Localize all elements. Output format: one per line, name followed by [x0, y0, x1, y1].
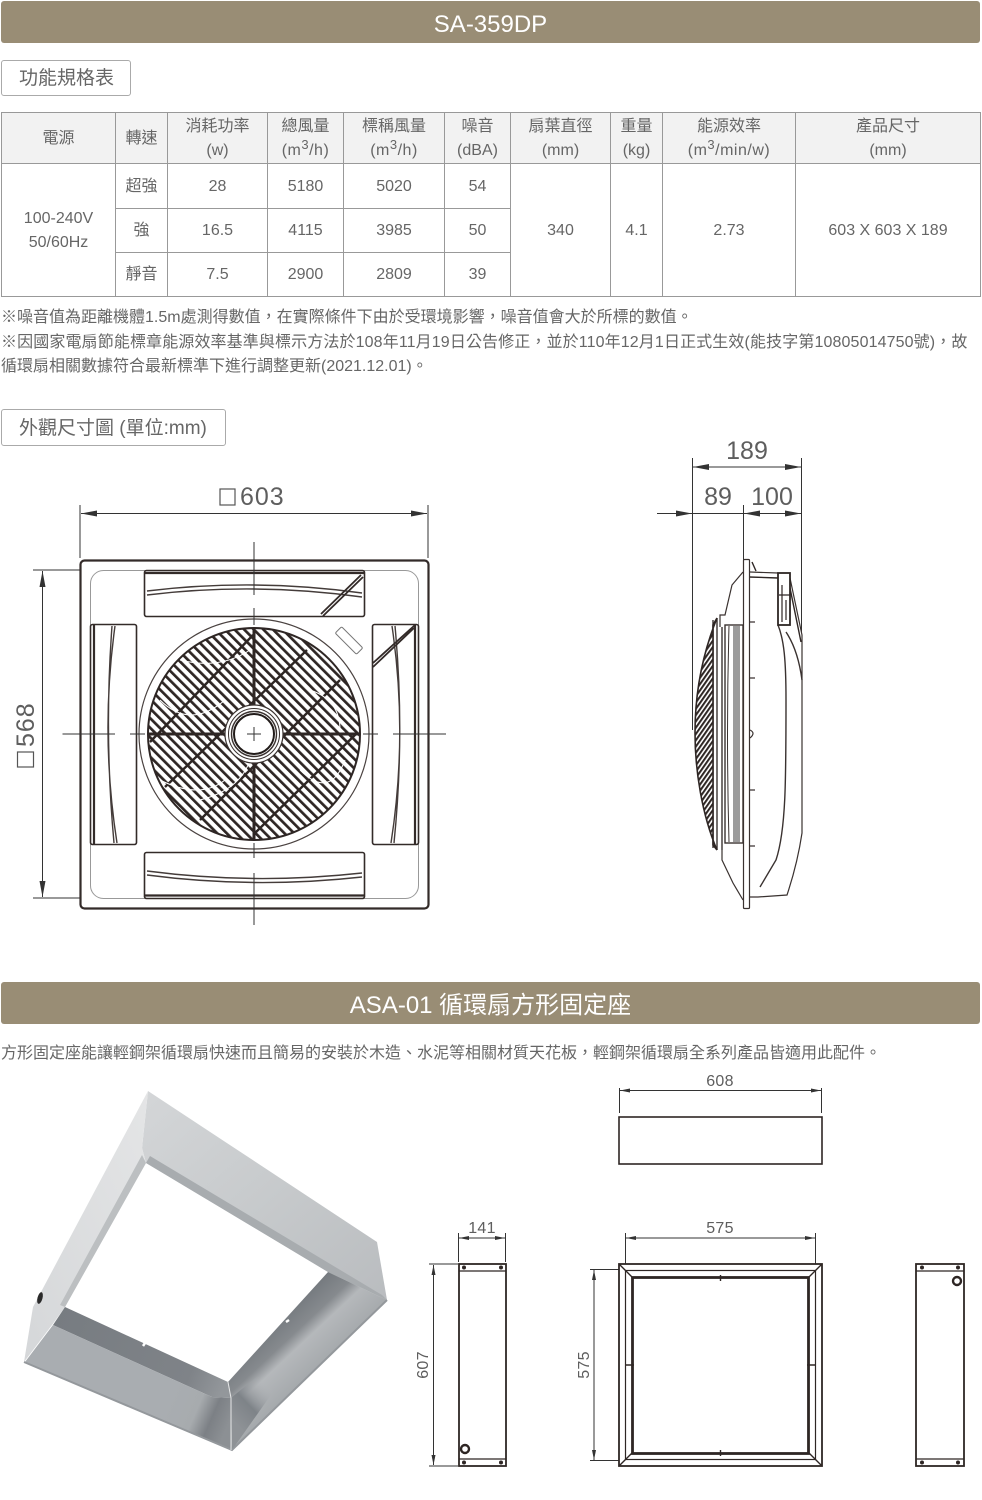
- heading: SA-359DP: [1, 1, 980, 43]
- spec table: 50: [469, 222, 486, 239]
- dimension: 141: 141: [468, 1220, 496, 1237]
- spec table: 標稱風量: [362, 118, 426, 135]
- dimension: 607: 607: [415, 1351, 432, 1379]
- spec table: 50/60Hz: [29, 234, 88, 250]
- cable hole: [36, 1292, 44, 1304]
- spec table: 總風量: [281, 118, 330, 135]
- spec table: 消耗功率: [185, 118, 250, 135]
- tab heading: dimension drawing: 外觀尺寸圖 (單位:mm): [19, 418, 207, 439]
- vent: left: [90, 624, 136, 844]
- spec table: (m3/h): [282, 137, 329, 159]
- side ticks: [750, 622, 755, 846]
- spec table: 5020: [376, 178, 412, 194]
- spec table: 16.5: [202, 222, 233, 239]
- spec table: 噪音: [461, 118, 494, 135]
- spec table: 39: [469, 266, 486, 283]
- drawing: frame right side: [916, 1264, 964, 1466]
- dimension: 608: [620, 1073, 822, 1113]
- spec table: 4115: [288, 222, 323, 239]
- small slot: [335, 627, 363, 654]
- spec table: (m3/min/w): [688, 137, 770, 159]
- back face: [142, 1091, 387, 1300]
- front view drawing of fan: [12, 483, 446, 925]
- top connecting band: [749, 562, 801, 642]
- spec table: 28: [209, 178, 226, 194]
- heading: SA-359DP: SA-359DP: [434, 11, 547, 38]
- fan guard: [695, 618, 717, 850]
- notches: [143, 1320, 289, 1346]
- center lines: [62, 542, 446, 925]
- spec table: 2900: [288, 266, 323, 283]
- spec table: 4.1: [625, 222, 648, 238]
- dimension: 575 vertical: [576, 1270, 620, 1460]
- inner vent: [725, 625, 743, 843]
- vent: right: [372, 624, 418, 844]
- spec table: 電源: [42, 130, 74, 147]
- dimension: 568: [12, 570, 90, 898]
- mounting plate: [744, 560, 750, 908]
- spec table: (m3/h): [370, 137, 418, 159]
- corner shading: [231, 1365, 292, 1450]
- dimension: 607: [415, 1264, 458, 1466]
- spec table: 產品尺寸: [856, 118, 920, 135]
- inner panel edge: [90, 570, 418, 898]
- tab heading: dimension drawing: [1, 409, 226, 446]
- spec table: (dBA): [457, 142, 498, 159]
- motor body: [750, 572, 802, 897]
- fan grille: [148, 628, 360, 840]
- bottom right inner face: [228, 1272, 387, 1450]
- spec table: 能源效率: [697, 118, 761, 135]
- inner rim: back: [146, 1156, 387, 1300]
- drawing: frame top view: [619, 1073, 822, 1164]
- dimension: 608: 608: [706, 1073, 734, 1090]
- bottom left lower panel: [25, 1325, 232, 1450]
- inner shell line: [760, 625, 802, 887]
- spec table: 超強: [125, 178, 158, 194]
- notes under table: ※因國家電扇節能標章能源效率基準與標示方法於108年11月19日公告修正，並於110年12月1日正式生效(能技字第10805014750號)，故: [1, 334, 968, 350]
- bottom left inner band: [53, 1307, 231, 1398]
- dimension: 603: [80, 483, 428, 558]
- heading: ASA-01: [1, 982, 980, 1024]
- notes under table: [1, 308, 968, 375]
- dimension: 189 / 89 / 100: 100: [751, 483, 793, 511]
- spec table: 靜音: [125, 266, 158, 283]
- tab heading: spec table: [1, 60, 131, 96]
- spec table: [1, 112, 981, 297]
- dimension: 575 vertical: 575: [576, 1351, 593, 1379]
- fan ring: [139, 619, 369, 849]
- left face: [24, 1091, 148, 1362]
- dimension: 189 / 89 / 100: 89: [704, 483, 732, 511]
- vent: top: [144, 570, 364, 616]
- drawing: frame front view: [576, 1220, 822, 1466]
- heading: ASA-01: ASA-01 循環扇方形固定座: [350, 992, 631, 1019]
- spec table: 340: [547, 222, 574, 238]
- spec table: (mm): [542, 142, 579, 159]
- spec table: 3985: [376, 222, 412, 239]
- spec table: 強: [133, 222, 150, 239]
- spec table: 54: [469, 178, 486, 194]
- spec table: 7.5: [206, 266, 229, 283]
- notes under table: ※噪音值為距離機體1.5m處測得數值，在實際條件下由於受環境影響，噪音值會大於所標的數值。: [1, 309, 693, 326]
- spec table: 2809: [376, 266, 412, 283]
- dimension: 568: 568: [12, 702, 40, 747]
- spec table: 5180: [288, 178, 323, 194]
- guard plates: [713, 618, 722, 850]
- spec table: (mm): [869, 142, 907, 159]
- dimension: 189 / 89 / 100: [657, 437, 802, 730]
- inner rim: left: [60, 1155, 146, 1307]
- corner seam: [228, 1382, 231, 1450]
- drawing: frame left side: [415, 1220, 506, 1466]
- spec table: (w): [206, 142, 229, 159]
- front shell: [720, 572, 743, 900]
- frame edge: [24, 1300, 387, 1450]
- spec table: 重量: [620, 118, 652, 135]
- dimension: 141: [458, 1220, 506, 1262]
- product render: square mounting frame: [24, 1091, 387, 1450]
- ASA-01 description: 方形固定座能讓輕鋼架循環扇快速而且簡易的安裝於木造、水泥等相關材質天花板，輕鋼架循環扇全系列產品皆適用此配件。: [1, 1045, 881, 1062]
- dimension: 575 horizontal: [626, 1220, 816, 1264]
- bracket box: [778, 573, 790, 625]
- spec table: 100-240V: [24, 210, 93, 226]
- spec table: 2.73: [713, 222, 745, 238]
- dimension: 575 horizontal: 575: [706, 1220, 734, 1237]
- fan hub: [225, 705, 283, 763]
- spec table: 603 X 603 X 189: [828, 222, 948, 238]
- tab heading: spec table: 功能規格表: [19, 68, 114, 89]
- spec table: 扇葉直徑: [528, 118, 592, 135]
- outer panel: [80, 560, 428, 908]
- spec table: 轉速: [125, 130, 158, 147]
- vent: bottom: [144, 852, 364, 898]
- notes under table: 循環扇相關數據符合最新標準下進行調整更新(2021.12.01)。: [1, 358, 428, 375]
- side view drawing of fan: [657, 437, 802, 908]
- dimension: 603: 603: [240, 483, 285, 511]
- spec table: (kg): [623, 142, 650, 159]
- dimension: 189 / 89 / 100: 189: [726, 437, 768, 465]
